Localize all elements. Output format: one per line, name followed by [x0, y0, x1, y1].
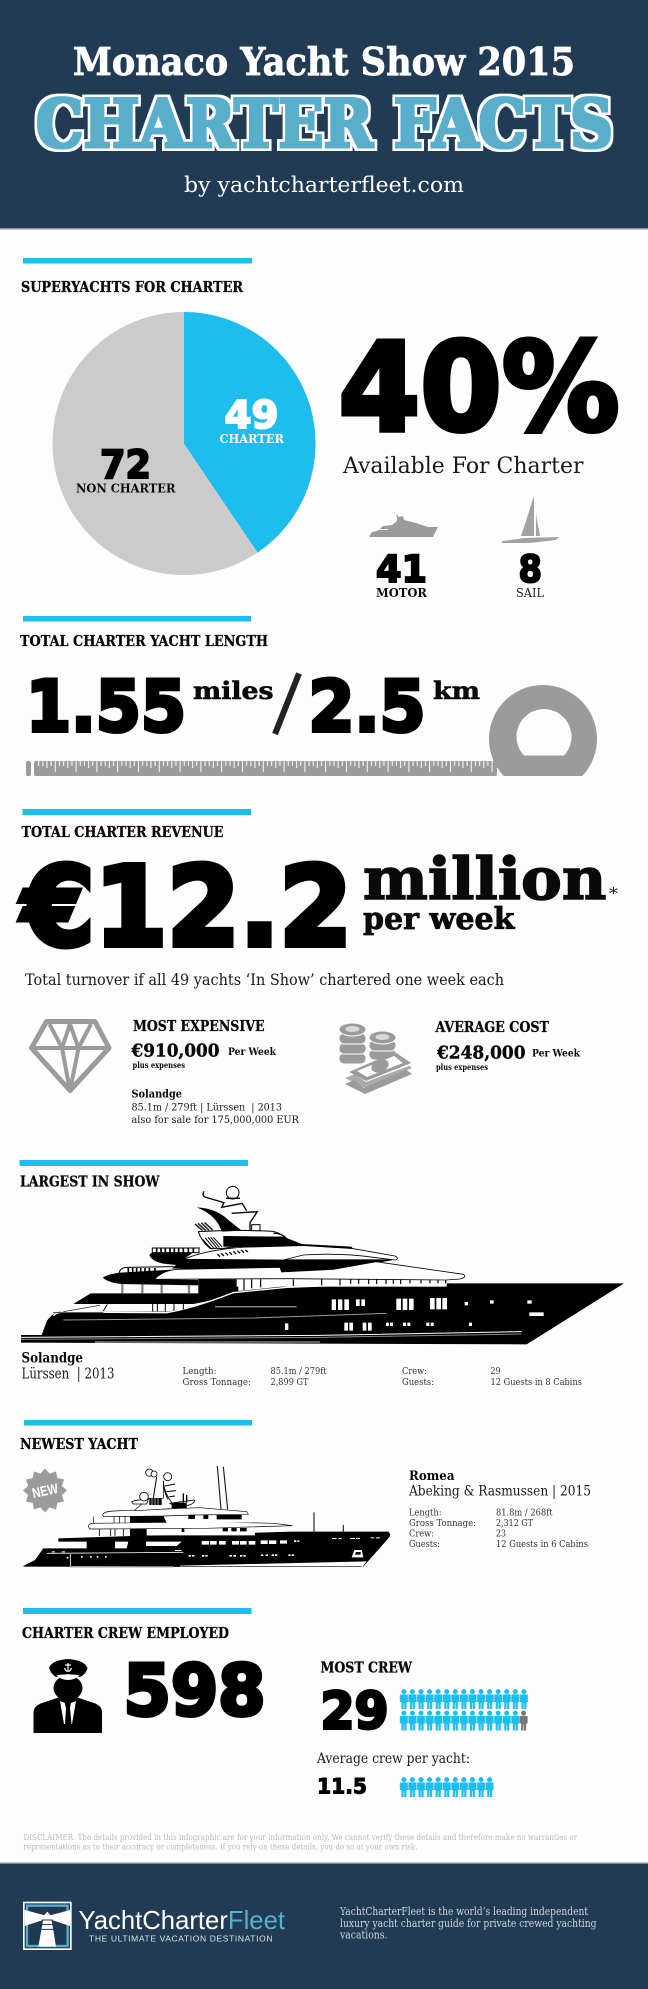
per week: per week [363, 902, 516, 937]
spec table: 29 [490, 1366, 500, 1377]
spec table: Gross Tonnage: [409, 1518, 476, 1529]
most crew heading: MOST CREW [320, 1660, 413, 1676]
slash [275, 674, 299, 734]
pie label charter: CHARTER [220, 431, 285, 446]
yacht specs line: 85.1m / 279ft | Lürssen | 2013 [132, 1102, 282, 1114]
builder and year: Abeking & Rasmussen | 2015 [408, 1484, 591, 1500]
km unit: km [433, 676, 480, 705]
yacht name: Romea [409, 1469, 455, 1484]
sail count: 8 [518, 547, 542, 591]
miles unit: miles [193, 676, 274, 705]
miles value: 1.55 [26, 666, 186, 748]
spec table: 23 [496, 1528, 506, 1540]
panel: header [0, 0, 648, 230]
illustration: Romea yacht [23, 1466, 390, 1567]
spec table: Length: [409, 1508, 442, 1518]
pie chart [52, 312, 316, 575]
panel: total charter revenue [19, 809, 618, 1126]
per week label: Per Week [532, 1048, 581, 1060]
icon: tape measure [26, 685, 597, 776]
most crew value: 29 [320, 1682, 388, 1742]
yacht name: Solandge [132, 1088, 182, 1100]
icon: diamond [31, 1022, 109, 1091]
yacht name: Solandge [22, 1350, 83, 1366]
heading: LARGEST IN SHOW [20, 1174, 160, 1190]
pictogram: most crew [400, 1689, 528, 1730]
heading: TOTAL CHARTER REVENUE [22, 824, 224, 841]
spec table: 2,312 GT [496, 1518, 534, 1529]
panel: total charter yacht length [20, 616, 597, 776]
logo tagline: THE ULTIMATE VACATION DESTINATION [89, 1934, 272, 1944]
panel: superyachts for charter [21, 258, 620, 600]
spec table: Crew: [402, 1366, 427, 1377]
heading: SUPERYACHTS FOR CHARTER [21, 279, 244, 296]
logo: lighthouse emblem [23, 1902, 72, 1950]
turnover note: Total turnover if all 49 yachts ‘In Show’ chartered one week each [25, 970, 504, 989]
panel: newest yacht [20, 1420, 591, 1567]
spec table: 85.1m / 279ft [270, 1366, 327, 1377]
builder and year: Lürssen | 2013 [22, 1366, 114, 1382]
disclaimer: representations as to their accuracy or completeness. If you rely on these details, you do so at your own risk. [24, 1842, 418, 1852]
per week label: Per Week [228, 1046, 277, 1058]
most expensive price: €910,000 [131, 1040, 220, 1062]
spec table: 81.8m / 268ft [496, 1508, 553, 1518]
footer description: YachtCharterFleet is the world’s leading independent [339, 1905, 588, 1918]
icon: captain [34, 1659, 102, 1733]
sail label: SAIL [516, 585, 544, 600]
badge: new [23, 1468, 67, 1512]
spec table: 2,899 GT [270, 1377, 309, 1388]
spec table: Length: [182, 1366, 216, 1377]
pie value 72: 72 [100, 443, 151, 488]
heading: NEWEST YACHT [20, 1436, 138, 1453]
spec table: 12 Guests in 8 Cabins [490, 1377, 582, 1388]
pie label non charter: NON CHARTER [76, 480, 176, 496]
spec table [409, 1508, 588, 1550]
spec table: Gross Tonnage: [182, 1377, 251, 1388]
average crew label: Average crew per yacht: [316, 1751, 470, 1767]
spec table [182, 1366, 582, 1388]
heading: CHARTER CREW EMPLOYED [22, 1625, 229, 1642]
km value: 2.5 [308, 666, 426, 748]
illustration: Solandge yacht [21, 1186, 624, 1344]
plus expenses: plus expenses [132, 1060, 185, 1070]
most expensive heading: MOST EXPENSIVE [133, 1018, 264, 1035]
spec table: Crew: [409, 1528, 434, 1540]
big revenue figure: €12.2 [19, 843, 352, 971]
available for charter: Available For Charter [342, 454, 584, 479]
footer description: vacations. [339, 1928, 388, 1942]
icon: motor yacht [369, 514, 438, 537]
big percentage: 40% [338, 317, 620, 459]
heading: TOTAL CHARTER YACHT LENGTH [20, 633, 268, 650]
footer description: luxury yacht charter guide for private crewed yachting [340, 1917, 596, 1930]
average crew value: 11.5 [317, 1774, 367, 1798]
crew total: 598 [124, 1650, 266, 1732]
average cost price: €248,000 [436, 1042, 526, 1064]
motor label: MOTOR [376, 585, 428, 600]
asterisk: * [609, 884, 618, 903]
icon: sailing yacht [501, 496, 559, 543]
icon: coins and banknotes [339, 1023, 412, 1094]
pictogram: average crew [400, 1777, 494, 1797]
panel: largest in show [20, 1160, 624, 1388]
subtitle: by yachtcharterfleet.com [184, 173, 464, 197]
spec table: Guests: [402, 1377, 434, 1388]
pie value 49: 49 [224, 393, 278, 437]
footer description [339, 1905, 596, 1942]
average cost heading: AVERAGE COST [435, 1019, 549, 1036]
panel: footer [0, 1862, 648, 1989]
plus expenses: plus expenses [436, 1062, 488, 1072]
spec table: Guests: [409, 1539, 440, 1550]
disclaimer [24, 1833, 578, 1852]
badge: new: NEW [31, 1480, 60, 1501]
panel: charter crew employed [22, 1608, 528, 1798]
sale price line: also for sale for 175,000,000 EUR [132, 1115, 299, 1126]
motor count: 41 [376, 547, 427, 591]
spec table: 12 Guests in 6 Cabins [496, 1539, 588, 1550]
title: Monaco Yacht Show 2015: Monaco Yacht Show 2015 [73, 39, 575, 84]
million: million [363, 845, 606, 913]
logo wordmark: YachtCharterFleet [78, 1905, 286, 1935]
